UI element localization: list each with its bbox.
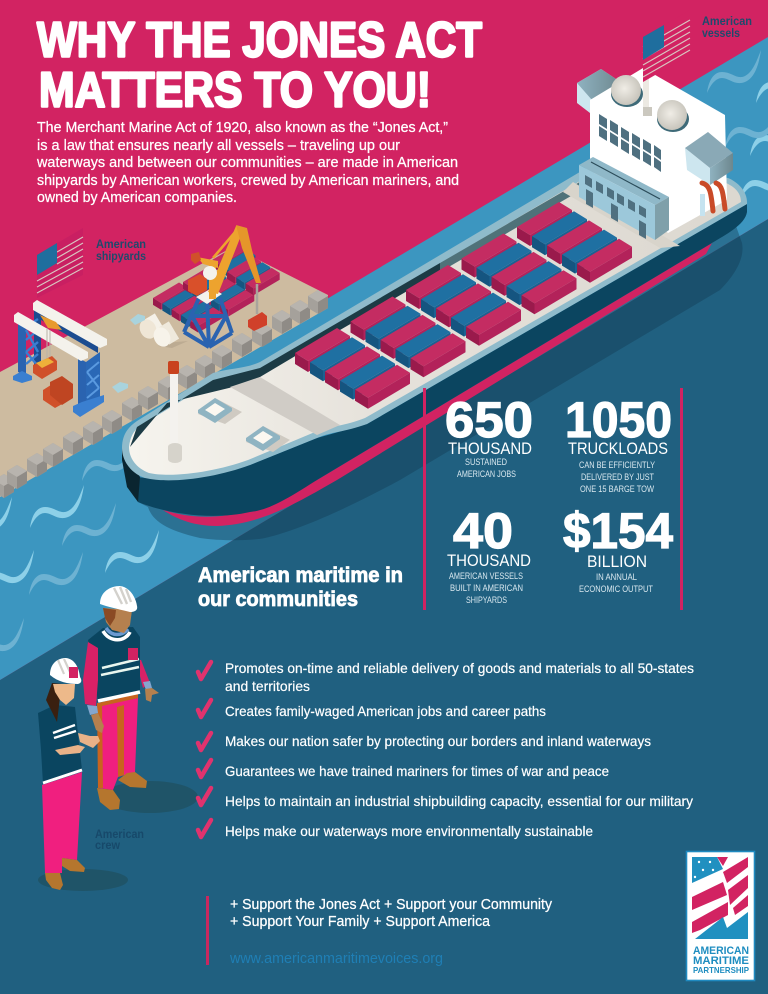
background: dark sea <box>0 219 768 994</box>
stat: 650 thousand: AMERICAN JOBS <box>457 469 516 480</box>
stat: $154 billion <box>563 503 673 595</box>
stat: $154 billion: ECONOMIC OUTPUT <box>579 584 653 595</box>
intro paragraph: The Merchant Marine Act of 1920, also known as the “Jones Act,” <box>37 120 448 136</box>
background: water channel <box>0 37 768 680</box>
label: American crew: crew <box>95 840 120 852</box>
item: shipbuilding: Helps to maintain an industrial shipbuilding capacity, essential for our military <box>225 793 693 809</box>
stat: 1050 truckloads: DELIVERED BY JUST <box>581 472 654 483</box>
shipyard quay <box>0 244 328 498</box>
label: American shipyards: shipyards <box>96 251 146 263</box>
title: MATTERS TO YOU! <box>39 64 431 118</box>
stat: 1050 truckloads: 1050 <box>565 392 672 448</box>
intro paragraph: owned by American companies. <box>37 190 237 206</box>
item: on-time delivery: and territories <box>225 678 310 694</box>
label: American shipyards <box>96 239 146 263</box>
stat: 650 thousand <box>445 392 533 480</box>
stat: 40 thousand <box>447 503 531 606</box>
heading: American maritime in our communities: American maritime in <box>198 564 403 587</box>
crew: man <box>83 586 198 813</box>
item: jobs: Creates family-waged American jobs and career paths <box>225 703 546 719</box>
intro paragraph: waterways and between our communities – are made in American <box>36 155 458 171</box>
stats panel <box>423 388 683 610</box>
bow mast <box>168 361 182 463</box>
label: American vessels: vessels <box>702 28 740 40</box>
crew: woman <box>38 658 128 891</box>
side cube <box>685 132 733 185</box>
call to action: + Support the Jones Act + Support your Community <box>230 897 553 913</box>
deck hatches <box>198 398 290 452</box>
stat: $154 billion: BILLION <box>587 552 647 571</box>
label: American crew: American <box>95 829 144 841</box>
deck <box>129 168 741 475</box>
intro paragraph: is a law that ensures nearly all vessels – traveling up our <box>37 138 400 154</box>
container ship <box>122 68 747 516</box>
title <box>37 14 482 118</box>
stat: 1050 truckloads: ONE 15 BARGE TOW <box>580 484 654 495</box>
intro paragraph: shipyards by American workers, crewed by American mariners, and <box>37 173 459 189</box>
intro paragraph <box>36 120 459 206</box>
call to action: www.americanmaritimevoices.org <box>229 950 443 967</box>
item: safety: Makes our nation safer by protecting our borders and inland waterways <box>225 733 651 749</box>
ship hull <box>138 204 747 516</box>
pink waterline stripe <box>163 243 712 526</box>
stat: $154 billion: IN ANNUAL <box>596 572 637 583</box>
logo: American Maritime Partnership: MARITIME <box>693 955 749 967</box>
logo: American Maritime Partnership <box>686 852 754 980</box>
cargo containers <box>295 202 632 409</box>
label: American vessels: American <box>702 16 752 28</box>
gantry crane <box>13 300 107 417</box>
item: on-time delivery: Promotes on-time and reliable delivery of goods and materials to all 50-states <box>225 660 694 676</box>
title: WHY THE JONES ACT <box>37 14 482 68</box>
stat: 650 thousand: SUSTAINED <box>465 457 507 468</box>
superstructure <box>577 68 733 240</box>
heading: American maritime in our communities <box>198 564 403 611</box>
red exhaust pipes <box>702 183 725 211</box>
ship shadow <box>138 226 743 540</box>
radar domes <box>611 75 689 132</box>
cargo rolls and cars <box>112 314 188 393</box>
label: American shipyards: American <box>96 239 146 251</box>
stat: 40 thousand: 40 <box>453 503 513 559</box>
flag: American shipyards <box>37 228 83 298</box>
stat: 1050 truckloads: CAN BE EFFICIENTLY <box>579 460 656 471</box>
stat: 40 thousand: SHIPYARDS <box>466 595 507 606</box>
item: environment: Helps make our waterways more environmentally sustainable <box>225 823 593 839</box>
stern deck strip <box>563 182 680 248</box>
stat: 650 thousand: THOUSAND <box>448 439 532 458</box>
stat: $154 billion: $154 <box>563 503 673 559</box>
stat: 40 thousand: AMERICAN VESSELS <box>449 571 523 582</box>
logo: American Maritime Partnership: AMERICAN <box>693 945 749 957</box>
heading: American maritime in our communities: our communities <box>198 588 358 611</box>
stat: 1050 truckloads <box>565 392 672 495</box>
stat: 40 thousand: THOUSAND <box>447 551 531 570</box>
stat: 40 thousand: BUILT IN AMERICAN <box>450 583 523 594</box>
port crane <box>184 225 267 347</box>
logo: American Maritime Partnership: PARTNERSHIP <box>693 965 749 975</box>
flag: American vessels <box>643 10 690 116</box>
label: American vessels <box>702 16 752 40</box>
stat: 650 thousand: 650 <box>445 392 533 448</box>
label: American crew <box>95 829 144 852</box>
item: on-time delivery <box>198 660 694 694</box>
benefits checklist <box>198 660 694 839</box>
call to action: + Support Your Family + Support America <box>230 914 491 930</box>
item: mariners: Guarantees we have trained mariners for times of war and peace <box>225 763 609 779</box>
stat: 1050 truckloads: TRUCKLOADS <box>568 439 668 458</box>
call to action <box>206 896 553 967</box>
